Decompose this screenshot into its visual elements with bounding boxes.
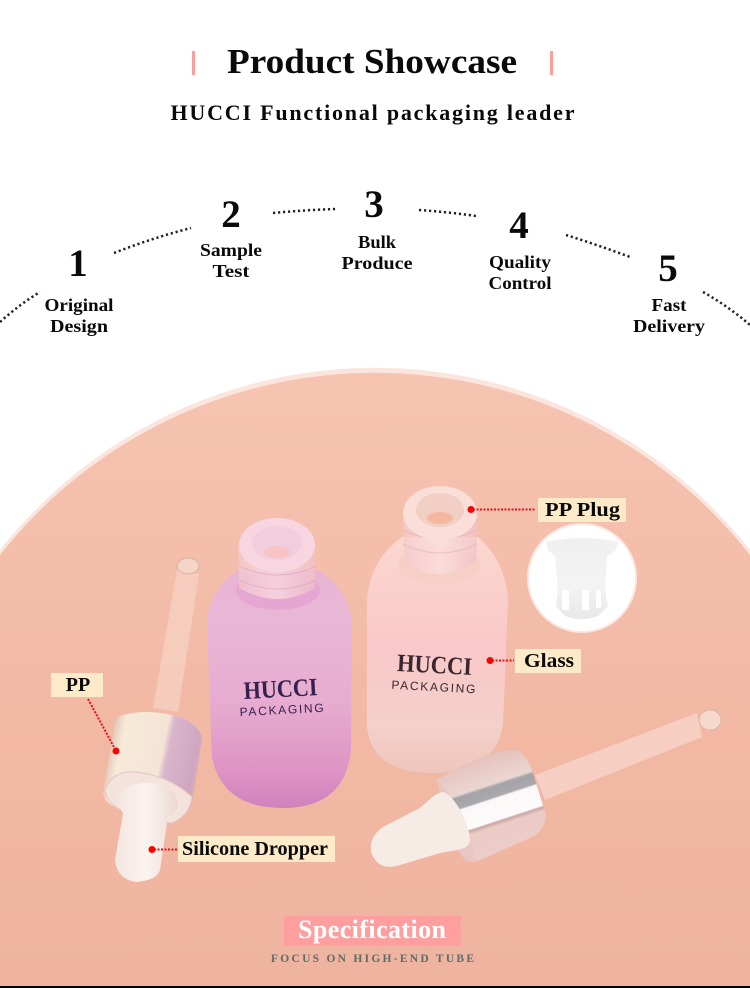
left dropper <box>103 558 202 882</box>
bottle logo: HUCCI <box>243 674 318 705</box>
step 5 <box>633 247 705 336</box>
callout: PP <box>51 673 120 754</box>
step 1 <box>44 242 114 336</box>
step 1: 1 <box>68 242 88 285</box>
bottle logo <box>391 650 477 696</box>
peach dome background <box>0 368 750 986</box>
step 3: Bulk <box>358 232 396 252</box>
bottle logo <box>238 674 324 719</box>
callout: PP: PP <box>66 674 90 696</box>
callout: Glass: Glass <box>524 650 574 672</box>
step 4: 4 <box>509 204 529 247</box>
step 3: 3 <box>364 183 384 226</box>
step 5: Delivery <box>633 316 705 336</box>
process arc <box>0 183 750 336</box>
callout: Silicone Dropper: Silicone Dropper <box>182 838 328 860</box>
subtitle: HUCCI Functional packaging leader <box>170 100 575 125</box>
bottle logo: HUCCI <box>396 650 473 681</box>
step 2: Test <box>212 261 250 281</box>
specification heading: FOCUS ON HIGH-END TUBE <box>271 953 474 965</box>
step 4 <box>488 204 552 293</box>
step 3: Produce <box>342 253 412 273</box>
step 4: Quality <box>489 252 551 272</box>
step 1: Design <box>50 316 108 336</box>
callout: Glass <box>486 649 581 673</box>
title: Product Showcase <box>227 42 517 81</box>
step 2: Sample <box>200 240 262 260</box>
step 2 <box>200 193 262 281</box>
callout: PP Plug <box>468 498 626 522</box>
purple bottle <box>207 518 352 808</box>
step 5: Fast <box>652 295 686 315</box>
callout: PP Plug: PP Plug <box>545 499 620 521</box>
inset: PP plug detail <box>528 524 636 632</box>
specification heading: Specification <box>298 915 447 944</box>
specification heading <box>0 915 750 965</box>
bottle logo: PACKAGING <box>239 701 324 719</box>
right dropper <box>371 710 721 867</box>
bottle logo: PACKAGING <box>391 678 476 696</box>
step 4: Control <box>488 273 552 293</box>
step 2: 2 <box>221 193 241 236</box>
step 1: Original <box>44 295 114 315</box>
callout: Silicone Dropper <box>148 836 335 862</box>
pink bottle <box>367 486 508 773</box>
step 3 <box>342 183 412 273</box>
step 5: 5 <box>658 247 678 290</box>
